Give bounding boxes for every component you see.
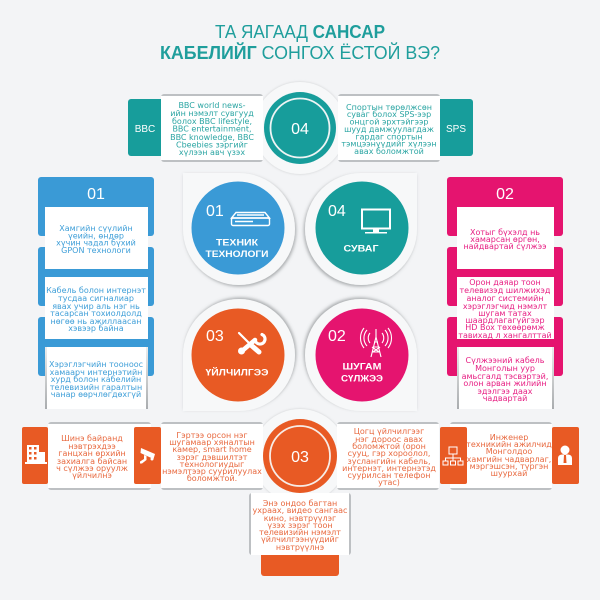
card 3: чадвартай	[483, 394, 527, 403]
card 2: хэвээр байна	[68, 324, 124, 333]
BBC tab	[128, 99, 164, 156]
card: smart home: боломжтой.	[187, 474, 237, 483]
icon: camera	[140, 448, 155, 464]
BBC card: хүлээн авч үзэх	[179, 148, 245, 157]
card: engineer	[440, 422, 579, 490]
SPS card: Спортын төрөлжсөн	[346, 103, 432, 112]
card: new building: ганцхан өрхийн	[58, 449, 126, 458]
card 1	[457, 207, 554, 269]
card: new building: нэвтрэхдээ	[68, 442, 116, 451]
BBC card: BBC world news-	[178, 101, 246, 110]
card: new building: үйлчилнэ	[72, 471, 112, 480]
card 3: эдэлгээ даах	[477, 387, 533, 396]
card: bottom center: нэвтрүүлнэ	[276, 543, 324, 552]
teardrop: channel: СУВАГ	[344, 244, 379, 254]
icon: tools	[238, 333, 265, 354]
SPS card: авах боломжтой	[354, 147, 424, 156]
card 1: Хамгийн сүүлийн	[59, 224, 133, 233]
teardrop: network	[305, 299, 417, 411]
teardrop: technology: ТЕХНОЛОГИ	[206, 249, 269, 259]
card: new building: Шинэ байранд	[61, 434, 123, 443]
title: КАБЕЛИЙГ СОНГОХ ЁСТОЙ ВЭ?	[160, 42, 440, 63]
BBC card: болох BBC lifestyle,	[172, 117, 252, 126]
card 3: телевизийн гаралтын	[50, 383, 142, 392]
teardrop: channel	[305, 173, 417, 285]
icon: tv	[362, 210, 390, 234]
card: all services: сууц, гэр хороолол,	[348, 449, 430, 458]
blue tabs	[38, 177, 154, 376]
icon: person	[558, 446, 572, 465]
card: all services: утас)	[378, 478, 400, 487]
SPS tab: SPS	[446, 124, 466, 135]
card: new building	[22, 422, 151, 490]
tab: building	[22, 427, 48, 484]
card 3: чанар өөрчлөгдөхгүй	[51, 390, 141, 399]
heading 02: 02	[496, 186, 514, 203]
card 1: Хотыг бүхэлд нь	[470, 228, 540, 237]
teardrop: network: СҮЛЖЭЭ	[341, 374, 383, 384]
card: smart home: шугамаар хяналтын	[169, 438, 255, 447]
card 2: явах учир аль нэг нь	[52, 302, 140, 311]
circle 04: 04	[291, 121, 309, 138]
card 2: Кабель болон интернэт	[46, 286, 146, 295]
panel: 03 service bottom	[22, 409, 579, 576]
teardrop: technology: ТЕХНИК	[216, 238, 258, 248]
BBC card: BBC entertainment,	[172, 124, 252, 134]
card: smart home	[134, 422, 263, 490]
icon: network	[443, 447, 463, 465]
icon: tower	[360, 328, 392, 357]
BBC card: BBC knowledge, BBC	[170, 133, 254, 142]
card: engineer: шуурхай	[491, 469, 527, 478]
card: all services: интернэт, интернэтэд	[342, 464, 436, 473]
SPS card	[338, 94, 440, 162]
card 2	[45, 277, 148, 339]
card 2: HD Box төхөөрөмж	[465, 323, 545, 332]
card 2: аналог системийн	[466, 294, 544, 303]
card 3: амьсгалд тэсвэртэй,	[462, 372, 548, 381]
card: all services: зуслангийн кабель,	[348, 457, 430, 466]
teardrop: service: ҮЙЛЧИЛГЭЭ	[206, 366, 269, 378]
BBC card: ийн нэмэлт сувгууд	[170, 109, 254, 118]
teardrop: service: 03	[206, 328, 224, 345]
card 1	[45, 207, 148, 269]
card: bottom center: Энэ ондоо багтан	[263, 499, 337, 508]
BBC card: Cbeebies зэргийг	[176, 140, 248, 150]
panel: center four circles	[183, 173, 417, 411]
SPS card: тэмцээнүүдийг хүлээн	[341, 140, 437, 148]
BBC card	[161, 94, 263, 162]
card 2	[457, 277, 554, 340]
circle 04	[254, 82, 346, 174]
teardrop: network: ШУГАМ	[342, 362, 382, 372]
icon: set-top box	[232, 212, 270, 226]
card 1: үеийн, өндөр	[68, 232, 124, 240]
card: bottom center: ухраах, видео сангаас	[253, 506, 347, 515]
card: new building: захиалга байсан	[57, 457, 127, 466]
card: all services: нэг дороос авах	[355, 435, 423, 444]
SPS card: шууд дамжуулагдаж	[344, 125, 434, 134]
card: smart home: зэрэг дэвшилтэт	[177, 453, 248, 462]
heading 01: 01	[87, 186, 105, 203]
card 1: хамарсан өргөн,	[470, 235, 540, 244]
card: bottom center: кино, нэвтрүүлэг	[264, 514, 336, 523]
card: all services: суурилсан телефон	[348, 471, 430, 480]
card: all services	[337, 422, 439, 490]
tab: camera	[134, 427, 161, 484]
BBC tab: BBC	[135, 124, 155, 135]
card 2: тасарсан тохиолдолд	[50, 309, 142, 318]
card 3	[45, 347, 148, 409]
card: smart home: камер, smart home	[172, 445, 252, 454]
card: engineer: техникийн ажилчид	[466, 440, 552, 449]
SPS card: суваг болох SPS-ээр	[347, 110, 431, 119]
card: engineer: мэргэшсэн, түргэн	[470, 462, 548, 471]
card: all services: боломжтой (орон	[352, 442, 426, 451]
card 2: тавихад л хангалттай	[458, 331, 552, 340]
SPS card: онцгой эрхтэйгээр	[350, 118, 428, 126]
icon: building	[25, 445, 47, 464]
pink tabs	[447, 177, 563, 376]
card: smart home: технологиудыг	[180, 460, 244, 469]
panel: 01 technology left	[38, 177, 154, 409]
teardrop: network: 02	[328, 328, 346, 345]
SPS card: гардаг спортын	[355, 132, 423, 142]
card 2: тусдаа сигналиар	[58, 294, 134, 303]
card 3: Сүлжээний кабель	[465, 356, 545, 365]
card 3: олон арван жилийн	[463, 379, 547, 388]
card: engineer: хамгийн чадварлаг,	[467, 455, 551, 464]
panel: 02 network right	[447, 177, 563, 409]
card: smart home: Гэртээ орсон нэг	[176, 431, 248, 440]
tab: network	[440, 427, 467, 484]
card: engineer: Инженер	[490, 433, 528, 442]
card 2: хэрэглэгчид нэмэлт	[463, 302, 548, 311]
circle 03: 03	[291, 449, 309, 466]
card 3: Монголын уур	[475, 364, 535, 373]
card 3: хамаарч интернэтийн	[50, 368, 142, 377]
card: bottom center: үйлчилгээнүүдийг	[261, 535, 339, 544]
SPS tab	[437, 99, 473, 156]
card 2: телевизэд шилжихэд	[460, 286, 551, 295]
card: smart home: нэмэлтээр суурилуулах	[162, 467, 262, 476]
teardrop: service	[183, 299, 295, 411]
title	[160, 22, 440, 63]
card: engineer: Монголдоо	[486, 447, 532, 456]
teardrop: technology	[183, 173, 295, 285]
teardrop: channel: 04	[328, 203, 346, 220]
card 2: шугам татах	[478, 309, 532, 318]
circle 03	[253, 409, 347, 503]
tab: person	[552, 427, 579, 484]
card 2: шаардлагагүйгээр	[465, 316, 545, 325]
title: ТА ЯАГААД САНСАР	[215, 22, 385, 42]
card: all services: Цогц үйлчилгээг	[354, 427, 424, 436]
card 1: GPON технологи	[61, 246, 131, 255]
card 2: нөгөө нь ажиллаасан	[50, 317, 142, 326]
card 1: хүчин чадал бүхий	[56, 238, 136, 248]
card 3: Хэрэглэгчийн тооноос	[49, 360, 143, 369]
card 1: найдвартай сүлжээ	[463, 242, 547, 251]
card: bottom center: үзэх зэрэг тоон	[267, 521, 333, 530]
card: bottom center: телевизийн нэмэлт	[259, 528, 341, 537]
teardrop: technology: 01	[206, 203, 224, 220]
card: new building: ч сүлжээ оруулж	[56, 464, 128, 473]
bottom tab	[261, 540, 339, 576]
panel: 04 channel top	[128, 82, 473, 174]
card: bottom center	[249, 493, 351, 555]
card 2: Орон даяар тоон	[469, 278, 541, 287]
card 3	[457, 347, 554, 409]
card 3: хурд болон кабелийн	[51, 375, 141, 384]
